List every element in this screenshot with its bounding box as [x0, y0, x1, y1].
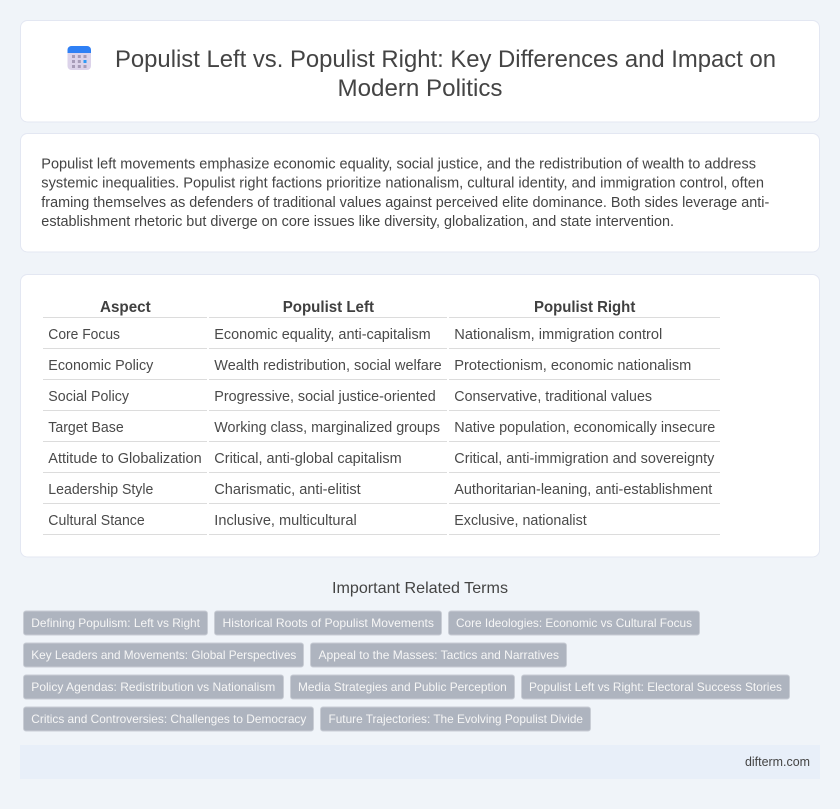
- table header row: [43, 299, 720, 318]
- table row: Attitude to Globalization: Critical, anti-global capitalism: [214, 451, 402, 467]
- heading: related terms: Important Related Terms: [332, 580, 508, 597]
- related terms tags: Populist Left vs Right: Electoral Success Stories: [529, 680, 782, 694]
- table row: Cultural Stance: Inclusive, multicultural: [214, 513, 357, 529]
- text block: summary paragraph: framing themselves as defenders of traditional values against perceived elite dominance. Both sides leverage anti-: [41, 195, 770, 211]
- table row: Core Focus: Nationalism, immigration control: [454, 327, 662, 343]
- table row: Economic Policy: Protectionism, economic nationalism: [454, 358, 691, 374]
- table row: Target Base: [43, 420, 720, 442]
- related terms tags: Future Trajectories: The Evolving Populist Divide: [328, 712, 583, 726]
- footer: [20, 745, 820, 779]
- text block: summary paragraph: systemic inequalities. Populist right factions prioritize nationalism, cultural identity, and immigration control, often: [41, 176, 764, 192]
- table row: Core Focus: Economic equality, anti-capitalism: [214, 327, 431, 343]
- related terms tags: Core Ideologies: Economic vs Cultural Focus: [456, 616, 692, 630]
- icon: calendar: [68, 46, 91, 70]
- table header row: Aspect: [100, 299, 151, 316]
- table row: Leadership Style: [43, 482, 720, 504]
- related terms tags: Critics and Controversies: Challenges to Democracy: [31, 712, 306, 726]
- text block: summary paragraph: [41, 156, 770, 230]
- table row: Target Base: Target Base: [48, 420, 124, 436]
- table row: Core Focus: Core Focus: [48, 327, 120, 343]
- table row: Leadership Style: Charismatic, anti-elitist: [214, 482, 361, 498]
- panel: description: [20, 134, 820, 252]
- panel: header: [20, 20, 820, 122]
- related terms tags: Media Strategies and Public Perception: [298, 680, 507, 694]
- table row: Leadership Style: Authoritarian-leaning, anti-establishment: [454, 482, 712, 498]
- related terms tags: Key Leaders and Movements: Global Perspectives: [31, 648, 296, 662]
- table row: Attitude to Globalization: [43, 451, 720, 473]
- table row: Cultural Stance: [43, 513, 720, 535]
- panel: comparison table: [20, 274, 820, 557]
- table row: Target Base: Native population, economically insecure: [454, 420, 715, 436]
- related terms tags: Policy Agendas: Redistribution vs Nationalism: [31, 680, 275, 694]
- table row: Cultural Stance: Exclusive, nationalist: [454, 513, 587, 529]
- title: [115, 46, 776, 102]
- related terms tags: Appeal to the Masses: Tactics and Narratives: [318, 648, 559, 662]
- text block: summary paragraph: Populist left movements emphasize economic equality, social justice, and the redistribution of wealth to address: [41, 156, 756, 172]
- related terms tags: Defining Populism: Left vs Right: [31, 616, 201, 630]
- table row: Social Policy: Progressive, social justice-oriented: [214, 389, 436, 405]
- table row: Attitude to Globalization: Critical, anti-immigration and sovereignty: [454, 451, 715, 467]
- table row: Economic Policy: Economic Policy: [48, 358, 154, 374]
- table row: Leadership Style: Leadership Style: [48, 482, 153, 498]
- table header row: Populist Left: [283, 299, 374, 316]
- table row: Target Base: Working class, marginalized groups: [214, 420, 440, 436]
- table row: Social Policy: Conservative, traditional values: [454, 389, 652, 405]
- footer: difterm.com: [745, 754, 810, 769]
- table row: Economic Policy: Wealth redistribution, social welfare: [214, 358, 442, 374]
- title: Populist Left vs. Populist Right: Key Differences and Impact on: [115, 46, 776, 73]
- table row: Core Focus: [43, 327, 720, 349]
- table row: Social Policy: [43, 389, 720, 411]
- related terms tags: Historical Roots of Populist Movements: [222, 616, 434, 630]
- title: Modern Politics: [338, 75, 502, 102]
- table row: Social Policy: Social Policy: [48, 389, 130, 405]
- table row: Economic Policy: [43, 358, 720, 380]
- table row: Attitude to Globalization: Attitude to Globalization: [48, 451, 202, 467]
- table row: Cultural Stance: Cultural Stance: [48, 513, 145, 529]
- table header row: Populist Right: [534, 299, 635, 316]
- related terms tags: [24, 611, 790, 731]
- text block: summary paragraph: establishment rhetoric but diverge on core issues like diversity, globalization, and state intervention.: [41, 214, 674, 230]
